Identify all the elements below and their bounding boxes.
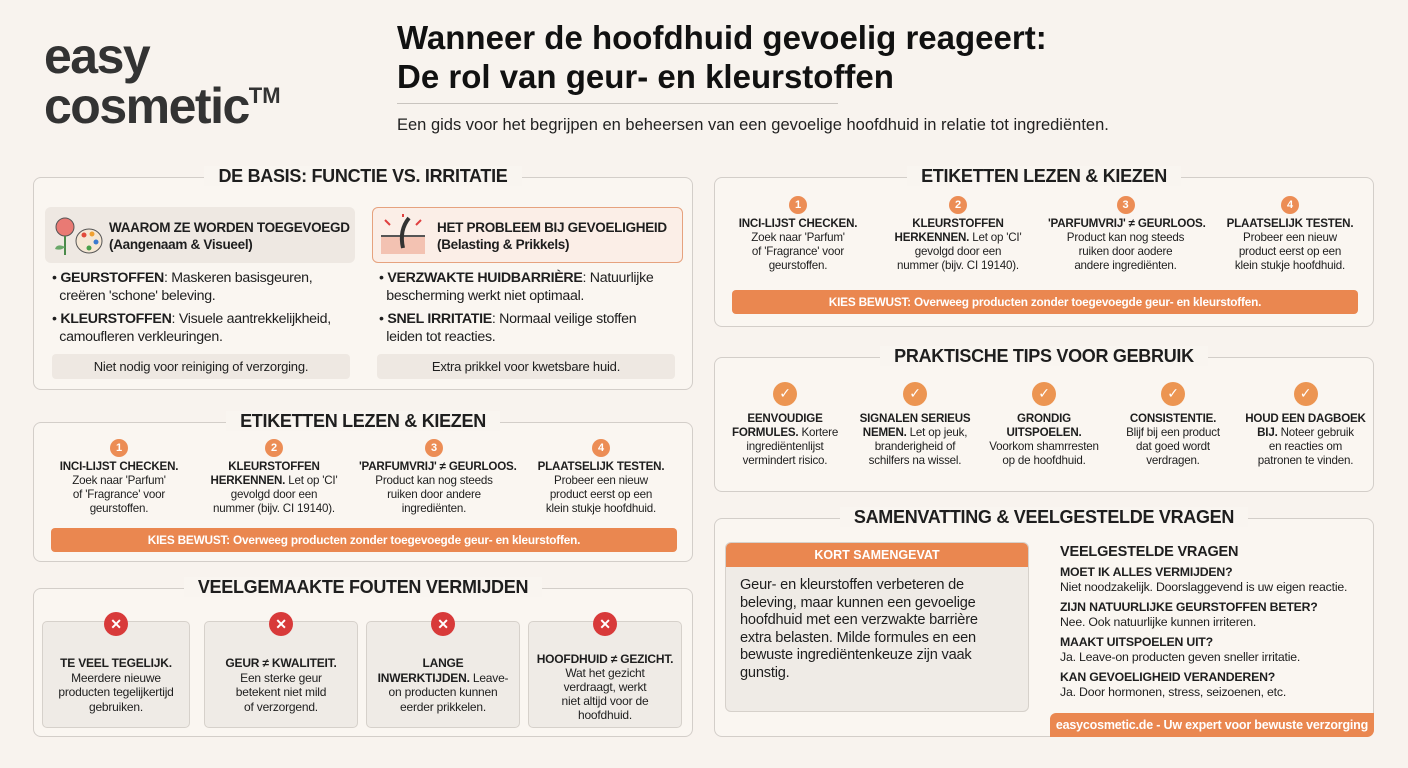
card 4: Wat het gezicht (565, 666, 645, 680)
text: ETIKETTEN LEZEN & KIEZEN (921, 166, 1167, 186)
card 2: ✕ (275, 616, 287, 632)
tip 3: GRONDIG (1017, 412, 1071, 425)
logo (44, 28, 281, 134)
step 4: 4 (598, 442, 604, 454)
tip 3: op de hoofdhuid. (1002, 454, 1086, 467)
summary box: bewuste ingrediëntenkeuze zijn vaak (740, 647, 972, 663)
step 4: PLAATSELIJK TESTEN. (538, 460, 664, 473)
step 4: product eerst op een (1239, 245, 1341, 258)
step 1: of 'Fragrance' voor (73, 488, 165, 501)
step 2: KLEURSTOFFEN (912, 217, 1004, 230)
panel: samenvatting (714, 518, 1374, 737)
card 3: ✕ (437, 616, 449, 632)
tip 3 (989, 382, 1099, 467)
summary box: extra belasten. Milde formules en een (740, 630, 976, 646)
bullets right: • VERZWAKTE HUIDBARRIÈRE: Natuurlijke (379, 270, 654, 286)
tip 2 (860, 382, 970, 467)
step 3: ingrediënten. (402, 502, 466, 515)
bullets left: • GEURSTOFFEN: Maskeren basisgeuren, (52, 270, 312, 286)
bar: KIES BEWUST: Overweeg producten zonder toegevoegde geur- en kleurstoffen. (829, 295, 1261, 309)
card 2: betekent niet mild (236, 685, 326, 699)
step 3: 3 (1122, 199, 1129, 211)
tip 2: ✓ (909, 386, 921, 402)
card 4: ✕ (599, 616, 611, 632)
tip 4 (1126, 382, 1220, 467)
tip 3: Voorkom shamrresten (989, 440, 1099, 453)
panel: fouten (33, 588, 693, 737)
step 4: Probeer een nieuw (554, 474, 648, 487)
icon: flower palette (55, 218, 102, 255)
subbox: waarom (45, 207, 355, 263)
tip 1 (732, 382, 838, 467)
card 3: on producten kunnen (389, 685, 497, 699)
step 1: 1 (116, 442, 122, 454)
card 1: gebruiken. (89, 700, 143, 714)
step 1: 1 (795, 199, 801, 211)
summary box: KORT SAMENGEVAT (814, 548, 940, 562)
footer bar: easycosmetic.de - Uw expert voor bewuste verzorging (1056, 718, 1368, 732)
step 2: nummer (bijv. CI 19140). (213, 502, 335, 515)
logo: easy (44, 28, 149, 84)
step 3: ruiken door andere (387, 488, 481, 501)
heading: DE BASIS: FUNCTIE VS. IRRITATIE (218, 166, 508, 186)
bar: KIES BEWUST: Overweeg producten zonder toegevoegde geur- en kleurstoffen. (148, 533, 580, 547)
step 1: Zoek naar 'Parfum' (72, 474, 166, 487)
card 2: GEUR ≠ KWALITEIT. (225, 656, 337, 670)
bullets right: leiden tot reacties. (386, 328, 495, 344)
step 2: nummer (bijv. CI 19140). (897, 259, 1019, 272)
text: ETIKETTEN LEZEN & KIEZEN (240, 411, 486, 431)
note left (52, 354, 350, 379)
card 4 (528, 621, 682, 728)
title (397, 19, 1047, 95)
tip 4: CONSISTENTIE. (1130, 412, 1216, 425)
faq: MOET IK ALLES VERMIJDEN? (1060, 565, 1232, 579)
bullets left (52, 270, 331, 344)
faq: VEELGESTELDE VRAGEN (1060, 544, 1238, 560)
title: De rol van geur- en kleurstoffen (397, 58, 894, 95)
step 3: ruiken door aodere (1079, 245, 1172, 258)
panel: etiketten right (714, 177, 1374, 327)
tip 2: NEMEN. Let op jeuk, (863, 426, 967, 439)
step 4: klein stukje hoofdhuid. (1235, 259, 1345, 272)
summary box (725, 542, 1029, 712)
step 3: 'PARFUMVRIJ' ≠ GEURLOOS. (1048, 217, 1206, 230)
step 3 (359, 439, 517, 515)
step 2: HERKENNEN. Let op 'CI' (895, 231, 1021, 244)
step 2: gevolgd door een (231, 488, 317, 501)
panel: etiketten left (33, 422, 693, 562)
text: SAMENVATTING & VEELGESTELDE VRAGEN (854, 507, 1234, 527)
summary box: gunstig. (740, 664, 790, 680)
card 2: Een sterke geur (240, 670, 322, 684)
card 1: producten tegelijkertijd (58, 685, 174, 699)
subbox: waarom: (Aangenaam & Visueel) (109, 237, 252, 252)
step 3: andere ingrediënten. (1074, 259, 1177, 272)
card 4: HOOFDHUID ≠ GEZICHT. (537, 652, 673, 666)
panel: tips (714, 357, 1374, 492)
faq: Ja. Door hormonen, stress, seizoenen, etc. (1060, 685, 1286, 699)
step 4: klein stukje hoofdhuid. (546, 502, 656, 515)
tip 4: Blijf bij een product (1126, 426, 1220, 439)
tip 1: EENVOUDIGE (747, 412, 823, 425)
subbox: probleem (372, 207, 683, 263)
tip 5 (1245, 382, 1366, 467)
card 1: Meerdere nieuwe (71, 670, 161, 684)
step 4: PLAATSELIJK TESTEN. (1227, 217, 1353, 230)
step 2: gevolgd door een (915, 245, 1001, 258)
step 3: 'PARFUMVRIJ' ≠ GEURLOOS. (359, 460, 517, 473)
step 1 (739, 196, 857, 272)
summary box: Geur- en kleurstoffen verbeteren de (740, 577, 964, 593)
summary box: beleving, maar kunnen een gevoelige (740, 594, 976, 610)
step 1: of 'Fragrance' voor (752, 245, 844, 258)
card 1: ✕ (110, 616, 122, 632)
step 1: geurstoffen. (90, 502, 148, 515)
card 3: eerder prikkelen. (400, 700, 486, 714)
bullets left: creëren 'schone' beleving. • KLEURSTOFFEN: Visuele aantrekkelijkheid, (52, 288, 331, 327)
text: VEELGEMAAKTE FOUTEN VERMIJDEN (198, 577, 528, 597)
step 1: INCI-LIJST CHECKEN. (60, 460, 178, 473)
step 4: Probeer een nieuw (1243, 231, 1337, 244)
step 4 (538, 439, 664, 515)
subtitle: Een gids voor het begrijpen en beheersen van een gevoelige hoofdhuid in relatie tot ingrediënten. (397, 116, 1109, 134)
footer bar (1050, 713, 1374, 737)
tip 5: BIJ. Noteer gebruik (1257, 426, 1354, 439)
faq (1060, 544, 1347, 699)
bullets left: camoufleren verkleuringen. (59, 328, 223, 344)
card 3 (366, 621, 520, 728)
logo: cosmeticTM (44, 78, 281, 134)
step 2: 2 (271, 442, 277, 454)
card 3: LANGE (422, 656, 464, 670)
tip 1: ✓ (779, 386, 791, 402)
subbox: probleem: HET PROBLEEM BIJ GEVOELIGHEID (437, 220, 667, 235)
bar (51, 528, 677, 552)
tip 4: ✓ (1167, 386, 1179, 402)
panel: basis (33, 177, 693, 390)
note right: Extra prikkel voor kwetsbare huid. (432, 359, 620, 374)
step 1: Zoek naar 'Parfum' (751, 231, 845, 244)
card 1 (42, 621, 190, 728)
subbox: waarom: WAAROM ZE WORDEN TOEGEVOEGD (109, 220, 350, 235)
faq: Ja. Leave-on producten geven sneller irritatie. KAN GEVOELIGHEID VERANDEREN? (1060, 650, 1300, 684)
note left: Niet nodig voor reiniging of verzorging. (94, 359, 308, 374)
step 4: 4 (1287, 199, 1293, 211)
tip 5: en reacties om (1269, 440, 1342, 453)
tip 5: patronen te vinden. (1258, 454, 1353, 467)
tip 4: dat goed wordt (1136, 440, 1210, 453)
subbox: probleem: (Belasting & Prikkels) (437, 237, 569, 252)
step 1: INCI-LIJST CHECKEN. (739, 217, 857, 230)
title: Wanneer de hoofdhuid gevoelig reageert: (397, 19, 1047, 56)
tip 2: branderigheid of (875, 440, 955, 453)
tip 4: verdragen. (1146, 454, 1200, 467)
tip 1: FORMULES. Kortere (732, 426, 838, 439)
card 1: TE VEEL TEGELIJK. (60, 656, 172, 670)
card 3: INWERKTIJDEN. Leave- (378, 670, 508, 684)
card 2: of verzorgend. (244, 700, 318, 714)
summary box: hoofdhuid met een verzwakte barrière (740, 612, 978, 628)
step 2 (211, 439, 338, 515)
note right (377, 354, 675, 379)
step 3 (1048, 196, 1206, 272)
tip 5: HOUD EEN DAGBOEK (1245, 412, 1366, 425)
step 1 (60, 439, 178, 515)
step 2: KLEURSTOFFEN (228, 460, 320, 473)
icon: skin hair (381, 214, 425, 254)
step 3: Product kan nog steeds (1067, 231, 1184, 244)
card 4: niet altijd voor de (562, 694, 648, 708)
tip 2: SIGNALEN SERIEUS (860, 412, 970, 425)
step 4 (1227, 196, 1353, 272)
card 4: verdraagt, werkt (564, 680, 646, 694)
step 2: HERKENNEN. Let op 'CI' (211, 474, 337, 487)
step 3: 3 (431, 442, 437, 454)
text: PRAKTISCHE TIPS VOOR GEBRUIK (894, 346, 1194, 366)
step 2: 2 (955, 199, 961, 211)
step 4: product eerst op een (550, 488, 652, 501)
step 1: geurstoffen. (769, 259, 827, 272)
tip 1: vermindert risico. (743, 454, 827, 467)
faq: Nee. Ook natuurlijke kunnen irriteren. MAAKT UITSPOELEN UIT? (1060, 615, 1256, 649)
step 3: Product kan nog steeds (375, 474, 493, 487)
card 4: hoofdhuid. (578, 708, 632, 722)
tip 2: schilfers na wissel. (869, 454, 961, 467)
card 2 (204, 621, 358, 728)
tip 3: ✓ (1038, 386, 1050, 402)
bullets right: bescherming werkt niet optimaal. • SNEL IRRITATIE: Normaal veilige stoffen (379, 288, 636, 327)
bullets right (379, 270, 654, 344)
tip 3: UITSPOELEN. (1006, 426, 1082, 439)
faq: Niet noodzakelijk. Doorslaggevend is uw eigen reactie. ZIJN NATUURLIJKE GEURSTOFFEN BETER? (1060, 580, 1347, 614)
tip 1: ingrediëntenlijst (746, 440, 824, 453)
step 2 (895, 196, 1022, 272)
bar (732, 290, 1358, 314)
tip 5: ✓ (1300, 386, 1311, 402)
